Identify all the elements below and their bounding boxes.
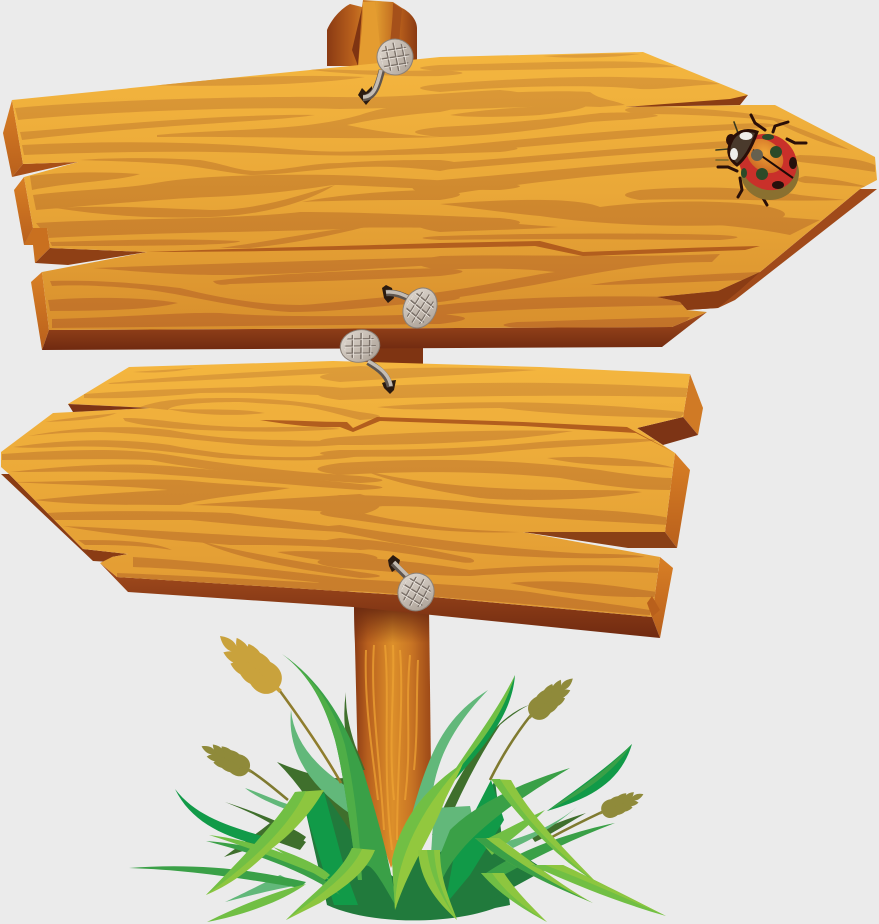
grass: folded lime blade centre (418, 850, 457, 920)
grass: folded lime blade upper left (206, 790, 324, 895)
ladybug (716, 115, 808, 205)
wheat head: top left (206, 621, 294, 707)
top sign: wood grain (15, 54, 875, 328)
grass: olive background blades (224, 692, 586, 857)
grass: central lime blade (392, 763, 463, 910)
nail 3 (335, 324, 396, 394)
grass: pale background blades (225, 690, 577, 902)
wheat head: top right (519, 667, 583, 729)
bottom sign: plank cracks (68, 404, 675, 617)
grass: mid green sweep (430, 768, 570, 885)
bottom sign: plank faces (1, 361, 690, 617)
wheat head: right (595, 783, 648, 824)
nail 2 (382, 280, 446, 336)
bottom sign (1, 361, 703, 638)
grass: right thin green blades (481, 810, 615, 880)
nail 1 (358, 31, 421, 105)
bottom sign: thickness (1, 374, 703, 638)
grass: folded lime blade upper right (491, 779, 597, 883)
top sign: plank cracks (147, 95, 760, 310)
post: upper stub (327, 0, 417, 66)
post: middle section between signs (352, 340, 423, 370)
ladybug: wing line (753, 150, 793, 178)
wheat stalks (249, 687, 602, 837)
grass: folded lime blade lower left (286, 848, 375, 920)
grass: folded blade bottom right (481, 873, 547, 922)
grass: dark central mound (306, 780, 545, 920)
post: lower section (354, 605, 431, 868)
grass: folded blade long right (531, 865, 666, 916)
grass: folded blade right (475, 838, 593, 903)
nail 4 (388, 555, 442, 619)
top sign: plank faces (12, 52, 877, 330)
grass (129, 621, 666, 922)
grass: top right green blade (438, 675, 515, 792)
grass: central tall blade (282, 654, 397, 908)
ladybug: orange elytra highlight (740, 132, 790, 180)
bottom sign: wood grain (2, 366, 688, 615)
ladybug: red shell (728, 122, 808, 202)
grass: far side bright blades (175, 744, 632, 844)
ladybug: head (726, 130, 757, 165)
wheat head: left (195, 734, 258, 784)
ladybug: shadow (741, 146, 799, 200)
top sign: right thickness (657, 189, 877, 310)
top sign: bottom thickness (42, 312, 707, 350)
top sign: left edges (3, 100, 147, 350)
top sign (3, 52, 877, 350)
ladybug: spots (741, 134, 797, 189)
ladybug: legs and antennae (716, 115, 806, 205)
grass: long left blades (129, 835, 340, 922)
